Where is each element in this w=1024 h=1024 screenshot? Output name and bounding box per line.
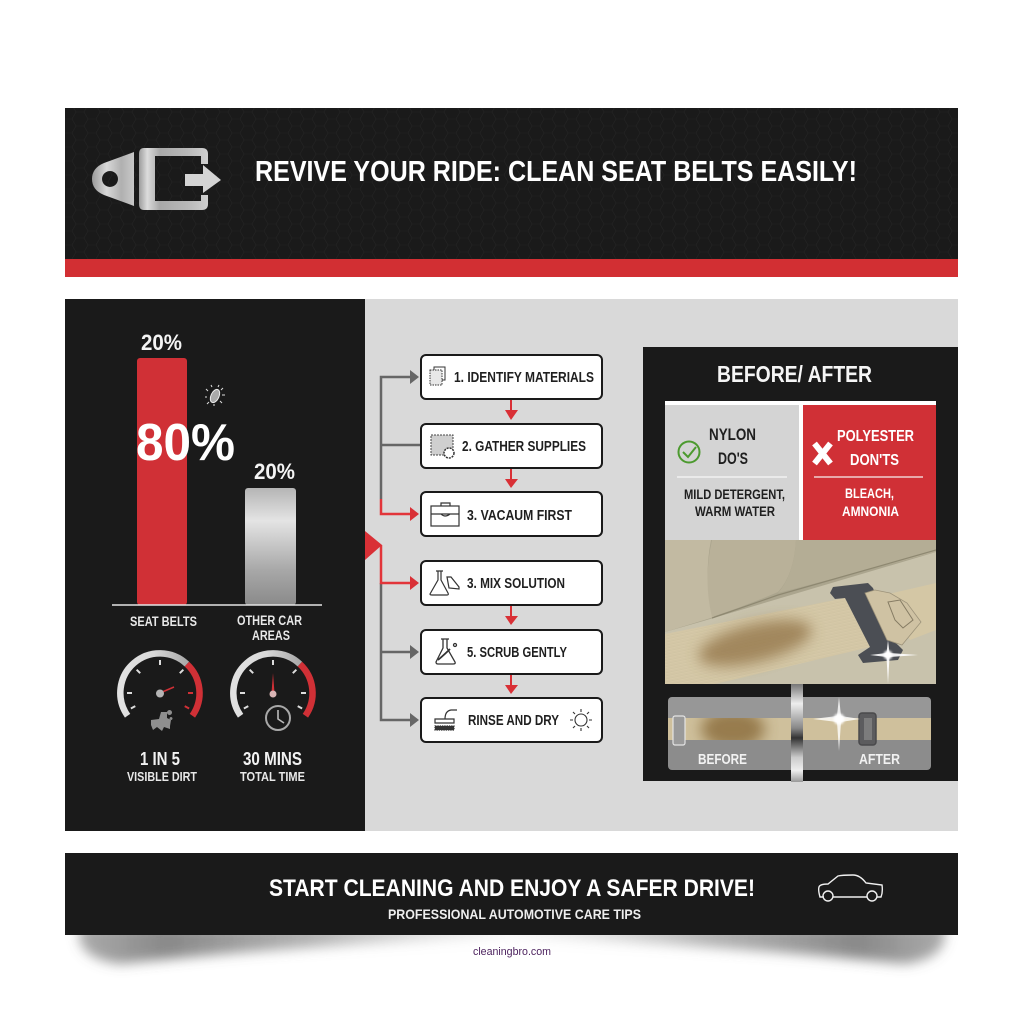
icon: sun (570, 709, 592, 731)
icon: dirt splat (151, 710, 173, 731)
card: nylon do's: MILD DETERGENT, (684, 487, 785, 502)
arrow: step 2 to 3 (505, 469, 518, 488)
icon: fabric swatches (430, 367, 445, 385)
title: REVIVE YOUR RIDE: CLEAN SEAT BELTS EASILY! (255, 156, 857, 188)
gauge: total time: TOTAL TIME (240, 769, 305, 784)
belt buckle (830, 583, 903, 663)
card: nylon do's: DO'S (718, 450, 748, 468)
icon: green check (678, 442, 700, 462)
icon: toolbox (431, 503, 459, 526)
gauge: visible dirt: 1 IN 5 (140, 749, 180, 769)
bar chart: 80% (136, 414, 235, 472)
step 4: mix solution: 3. MIX SOLUTION (467, 576, 565, 592)
step 6: rinse and dry (421, 698, 602, 742)
bar chart (112, 330, 322, 643)
panel: before/after (643, 347, 958, 782)
card: polyester don'ts: BLEACH, (845, 486, 894, 501)
step 1: identify materials: 1. IDENTIFY MATERIALS (454, 370, 594, 386)
bar chart: 20% (141, 330, 182, 355)
gauge: visible dirt: VISIBLE DIRT (127, 769, 197, 784)
main panel background (365, 299, 958, 831)
icon: flask and cloth (430, 571, 459, 595)
card: polyester don'ts: AMNONIA (842, 504, 899, 519)
icon: white x (814, 444, 830, 464)
card: nylon do's: WARM WATER (695, 504, 775, 519)
chrome divider (791, 684, 803, 782)
heading: before/after: BEFORE/ AFTER (717, 361, 872, 387)
gauge: visible dirt (120, 653, 200, 784)
sparkle (870, 640, 918, 684)
step 3: vacuum first: 3. VACAUM FIRST (467, 508, 572, 524)
footer drop shadow (79, 925, 945, 964)
icon: seat belt buckle (92, 148, 221, 210)
bar chart: SEAT BELTS (130, 614, 197, 629)
card: polyester don'ts (803, 405, 936, 540)
photo: dirty seat belt (665, 540, 936, 690)
before and after strip (668, 697, 931, 770)
infographic canvas (65, 108, 958, 972)
step 2: gather supplies: 2. GATHER SUPPLIES (462, 439, 586, 455)
icon: clock (266, 706, 290, 730)
step 3: vacuum first (421, 492, 602, 536)
step 4: mix solution (421, 561, 602, 605)
gauge: total time (233, 653, 313, 784)
card: polyester don'ts: DON'TS (850, 452, 899, 469)
gauge: total time: 30 MINS (243, 749, 302, 769)
arrow: step 1 to 2 (505, 400, 518, 420)
bar chart: OTHER CAR (237, 613, 302, 628)
panel: statistics (65, 299, 365, 831)
card: nylon do's: NYLON (709, 426, 756, 444)
step 5: scrub gently: 5. SCRUB GENTLY (467, 645, 567, 661)
icon: cloth and gear (431, 435, 454, 458)
icon: car (819, 875, 882, 901)
step 5: scrub gently (421, 630, 602, 674)
bar chart: 20% (254, 459, 295, 484)
bar chart: AREAS (252, 628, 290, 643)
arrow: step 5 to 6 (505, 675, 518, 694)
sparkle (813, 697, 860, 751)
icon: germ (205, 385, 225, 406)
card: nylon do's (665, 405, 799, 540)
card: polyester don'ts: POLYESTER (837, 428, 914, 445)
before and after strip: AFTER (859, 752, 900, 768)
arrow: step 4 to 5 (505, 606, 518, 625)
icon: flask (436, 639, 456, 664)
footer banner: START CLEANING AND ENJOY A SAFER DRIVE! (269, 875, 755, 902)
flow connector (365, 370, 420, 727)
step 1: identify materials (421, 355, 602, 399)
before and after strip: BEFORE (698, 752, 747, 768)
icon: scrub brush (435, 710, 457, 730)
source credit: cleaningbro.com (473, 946, 551, 958)
footer banner (65, 853, 958, 935)
header banner (65, 108, 958, 277)
footer banner: PROFESSIONAL AUTOMOTIVE CARE TIPS (388, 906, 641, 922)
step 2: gather supplies (421, 424, 602, 468)
step 6: rinse and dry: RINSE AND DRY (468, 713, 559, 729)
